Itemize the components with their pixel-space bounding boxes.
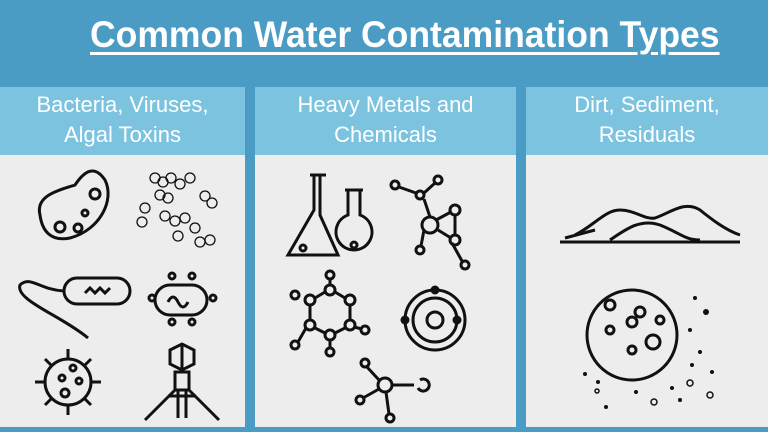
icon: small molecule (356, 359, 429, 422)
panel: bacteria body (0, 155, 245, 427)
icon: virus oval (149, 273, 216, 325)
icon: atom (402, 287, 465, 350)
panel header: metals: Heavy Metals and (297, 92, 474, 117)
panel header: metals (255, 87, 516, 155)
panel header: bacteria (0, 87, 245, 155)
icon: cocci cluster (137, 173, 217, 247)
icon: flasks (288, 175, 372, 255)
icon: virus round (35, 349, 101, 415)
panel header: dirt: Residuals (599, 122, 695, 147)
title: Common Water Contamination Types (90, 14, 720, 55)
panel header: dirt: Dirt, Sediment, (574, 92, 720, 117)
icon: molecule top (391, 176, 469, 269)
icon: hexagon molecule (291, 271, 369, 356)
panel: metals body (255, 155, 516, 427)
panel header: metals: Chemicals (334, 122, 437, 147)
icon: dirt pile (560, 206, 740, 242)
panel header: bacteria: Algal Toxins (64, 122, 181, 147)
panel header: bacteria: Bacteria, Viruses, (36, 92, 208, 117)
panel: dirt body (526, 155, 768, 427)
icon: sediment circle (587, 290, 677, 380)
icon: bacterium bean (39, 171, 108, 239)
icon: loose particles (583, 296, 714, 409)
panel header: dirt (526, 87, 768, 155)
icon: bacteriophage (145, 344, 219, 420)
icon: bacillus with flagellum (20, 278, 130, 338)
